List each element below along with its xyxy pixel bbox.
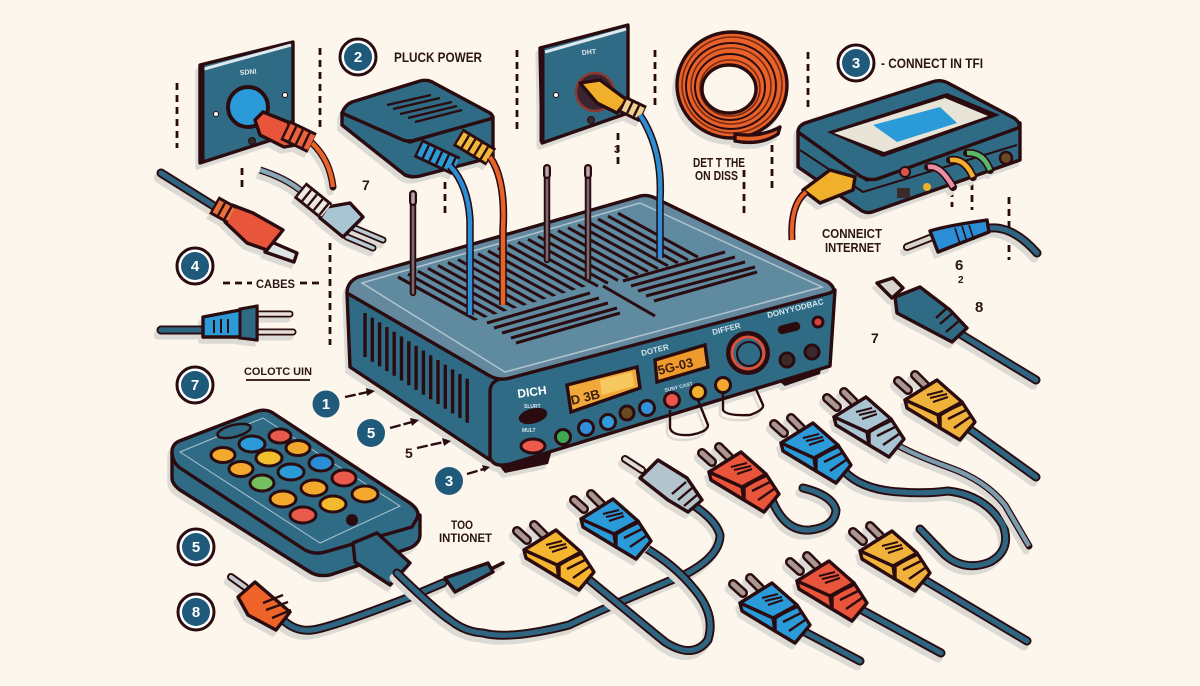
panel: modem <box>798 81 1020 212</box>
step 7 badge: 7 <box>191 377 199 394</box>
callout: too internet: TOO <box>451 518 473 532</box>
badge 8 <box>178 594 214 630</box>
plug: yellow with loop cable <box>517 525 710 651</box>
display right <box>655 345 708 382</box>
colour label: COLOTC UIN <box>244 366 312 378</box>
panel: plate SDNI: SDNI <box>240 69 257 77</box>
remote connector <box>353 533 410 585</box>
panel labels: DOTER <box>640 342 670 358</box>
number 5 arrow: 5 <box>405 445 413 461</box>
stray numbers: 8 <box>975 299 983 316</box>
front vents on top <box>470 250 765 352</box>
plug: yellow bottom right <box>853 526 1027 641</box>
callout: too internet <box>439 518 493 545</box>
cable: orange plug to jack <box>231 563 503 630</box>
panel labels: DONYYODBAC <box>766 297 825 320</box>
heading: step 3 connect <box>838 45 983 81</box>
knob <box>726 331 770 375</box>
plug: red with hook cable <box>702 447 836 530</box>
callout: connect internet <box>822 226 882 255</box>
stray numbers: 3 <box>614 144 620 156</box>
panel labels: DICH <box>516 383 547 401</box>
badge 5: 5 <box>192 539 200 556</box>
plug: red bottom <box>790 556 941 653</box>
panel labels <box>516 297 825 434</box>
heading: step 2 <box>340 39 482 75</box>
labels left <box>177 248 312 403</box>
top vent grid <box>398 213 698 321</box>
side vents <box>365 313 467 423</box>
callout: connect internet: INTERNET <box>825 240 881 255</box>
stray numbers: 2 <box>958 275 964 286</box>
cable left top with red plug <box>161 173 297 262</box>
top of receiver <box>347 195 834 379</box>
plug: blue with loop cable <box>574 494 651 559</box>
panel labels: DIFFER <box>711 321 742 337</box>
callout: connect internet: CONNEICT <box>822 226 882 241</box>
step 3 arrow <box>435 465 490 495</box>
guide lines <box>177 48 1009 345</box>
plug: blue with long s cable <box>774 418 1006 566</box>
cables label: CABES <box>256 277 295 291</box>
step 1 arrow: 1 <box>322 396 330 413</box>
feet <box>493 362 822 473</box>
badge 8: 8 <box>192 604 200 621</box>
number 5 arrow <box>405 438 451 461</box>
panel: dish receiver <box>347 195 835 473</box>
plug: yellow top right <box>898 375 1036 477</box>
plug: blue bottom <box>733 578 860 661</box>
step 4 badge <box>177 248 213 284</box>
remote buttons <box>211 429 378 524</box>
stray numbers: 6 <box>955 257 963 274</box>
panel labels: SLURT <box>524 404 541 410</box>
plug: grey with tapered cable <box>827 392 1029 546</box>
callout: coil <box>693 155 745 183</box>
cable left top with grey plug <box>260 170 383 248</box>
blue jack upper right <box>907 220 1037 253</box>
cable left with blue plug <box>161 306 293 340</box>
panel: plate DHT <box>540 25 643 143</box>
heading: step 2: 2 <box>354 49 362 66</box>
display left: D 3B <box>569 386 601 408</box>
usb plug right <box>877 278 1036 380</box>
display left <box>567 367 640 412</box>
heading: step 2: PLUCK POWER <box>394 49 482 65</box>
receiver wires <box>670 387 763 435</box>
heading: step 3 connect: - CONNECT IN TFI <box>881 55 983 71</box>
icon: orange cable coil <box>677 32 787 142</box>
step 1 arrow <box>312 388 375 418</box>
antennas <box>413 168 588 293</box>
stray numbers: 7 <box>871 330 879 346</box>
front buttons <box>519 317 823 453</box>
cable from modem <box>792 192 806 240</box>
callout: too internet: INTIONET <box>439 531 493 545</box>
cable from plate DHT <box>640 115 660 258</box>
badge 5 <box>178 529 214 565</box>
step 3 arrow: 3 <box>445 473 453 490</box>
panel labels: MULT <box>522 428 536 434</box>
left side of receiver <box>347 293 500 460</box>
panel: power box <box>342 80 493 177</box>
cables from power box <box>450 157 503 315</box>
step 5 arrow <box>357 418 419 447</box>
cable: remote to grey jack <box>397 459 720 635</box>
display right: 5G-03 <box>656 355 695 378</box>
front panel <box>490 290 835 465</box>
callout: coil: ON DISS <box>695 168 738 183</box>
panel: plate SDNI <box>200 42 333 187</box>
step 4 badge: 4 <box>191 258 200 275</box>
stray numbers: 7 <box>362 177 370 193</box>
step 5 arrow: 5 <box>367 425 375 442</box>
heading: step 3 connect: 3 <box>852 55 860 72</box>
panel labels: SUNY CAST <box>664 381 693 394</box>
step 7 badge <box>177 367 213 403</box>
panel: remote control <box>172 410 420 585</box>
arrows and number badges <box>312 388 490 495</box>
panel: plate DHT: DHT <box>582 49 597 57</box>
callout: coil: DET T THE <box>693 155 745 170</box>
stray numbers <box>362 144 983 346</box>
